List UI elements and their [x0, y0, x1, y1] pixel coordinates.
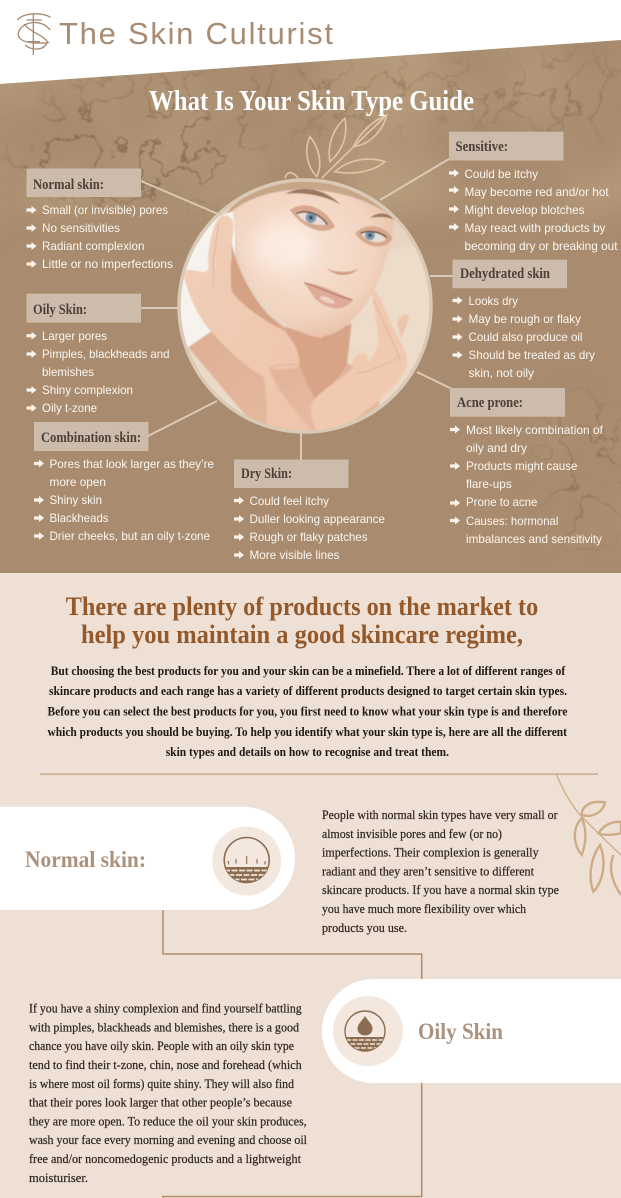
heading: sensitive: Sensitive: — [456, 139, 508, 155]
text: oily skin description: is where most oil forms) quite shiny. They will also find — [29, 1077, 295, 1091]
list: dehydrated skin: Could also produce oil — [468, 330, 582, 344]
list: oily skin: blemishes — [42, 365, 94, 379]
intro text: Before you can select the best products for you, you first need to know what your skin type is and therefore — [48, 704, 568, 718]
text: normal skin description: skincare products. If you have a normal skin type — [322, 883, 559, 897]
list: combination skin: more open — [50, 475, 106, 489]
text: normal skin description: radiant and they aren’t sensitive to different — [322, 864, 534, 878]
logo — [17, 13, 333, 55]
decorative leaf branch — [557, 775, 621, 895]
text: oily skin description: they are more open. To reduce the oil your skin produces, — [29, 1114, 307, 1128]
list: combination skin: Pores that look larger as they’re — [50, 457, 214, 471]
marble background — [0, 30, 621, 575]
heading: normal skin: Normal skin: — [33, 177, 104, 193]
panel: normal skin — [26, 168, 173, 271]
facial features — [285, 189, 394, 308]
list: normal skin: Small (or invisible) pores — [42, 203, 168, 217]
list: combination skin — [34, 457, 214, 543]
text: oily skin description: that their pores look larger that other people’s because — [29, 1096, 292, 1110]
intro heading — [66, 592, 538, 649]
list: oily skin — [26, 329, 170, 415]
list: dry skin — [234, 494, 385, 562]
heading: acne prone — [450, 388, 565, 417]
list: dehydrated skin: Looks dry — [468, 294, 518, 308]
heading: normal skin: Normal skin: — [25, 847, 146, 872]
heading: combination skin: Combination skin: — [41, 430, 141, 446]
list: normal skin: Radiant complexion — [42, 239, 144, 253]
heading: dehydrated skin — [452, 260, 567, 288]
header band — [0, 0, 621, 90]
heading: combination skin — [34, 422, 148, 451]
heading: oily skin: Oily Skin — [418, 1019, 503, 1044]
text: oily skin description: with pimples, blackheads and blemishes, there is a good — [29, 1020, 300, 1034]
list: dehydrated skin — [452, 294, 595, 380]
text: oily skin description: wash your face every morning and evening and choose oil — [29, 1133, 307, 1147]
list: normal skin — [26, 203, 173, 271]
text: oily skin description: chance you have oily skin. People with an oily skin type — [29, 1039, 294, 1053]
logo wordmark: The Skin Culturist — [59, 16, 333, 51]
intro text: skincare products and each range has a variety of different products designed to target certain skin types. — [49, 684, 567, 698]
list: normal skin: Little or no imperfections — [42, 257, 173, 271]
intro heading: help you maintain a good skincare regime, — [81, 620, 523, 649]
heading: dry skin — [234, 460, 348, 488]
text: oily skin description: tend to find their t-zone, chin, nose and forehead (which — [29, 1058, 302, 1072]
list: dry skin: More visible lines — [250, 548, 340, 562]
list: dry skin: Rough or flaky patches — [250, 530, 368, 544]
panel: oily skin — [26, 294, 170, 415]
list: dehydrated skin: Should be treated as dry — [468, 348, 595, 362]
panel: dehydrated skin — [452, 260, 595, 380]
text: oily skin description: free and/or noncomedogenic products and a lightweight — [29, 1152, 301, 1166]
text: normal skin description: you have much more flexibility over which — [322, 902, 527, 916]
list: oily skin: Larger pores — [42, 329, 107, 343]
panel: sensitive — [449, 132, 618, 253]
text: normal skin description: products you use. — [322, 921, 407, 935]
list: combination skin: Drier cheeks, but an oily t-zone — [50, 529, 210, 543]
divider — [40, 774, 598, 775]
heading: normal skin — [26, 168, 141, 197]
list: dry skin: Duller looking appearance — [250, 512, 385, 526]
list: acne prone: Most likely combination of — [466, 423, 604, 437]
text: oily skin description: moisturiser. — [29, 1171, 88, 1185]
list: dehydrated skin: May be rough or flaky — [468, 312, 581, 326]
list: acne prone: flare-ups — [466, 477, 512, 491]
list: sensitive: Could be itchy — [464, 167, 538, 181]
list: sensitive: becoming dry or breaking out — [464, 239, 618, 253]
list: acne prone: Prone to acne — [466, 495, 538, 509]
list: acne prone: Causes: hormonal — [466, 514, 558, 528]
icon: oily skin — [333, 996, 403, 1066]
list: dehydrated skin: skin, not oily — [468, 366, 534, 380]
list: acne prone: Products might cause — [466, 459, 578, 473]
heading: dry skin: Dry Skin: — [241, 466, 292, 482]
heading: acne prone: Acne prone: — [457, 395, 523, 411]
list: sensitive — [449, 167, 618, 253]
intro text: skin types and details on how to recognise and treat them. — [166, 745, 449, 759]
list: combination skin: Shiny skin — [50, 493, 102, 507]
panel: combination skin — [34, 422, 214, 543]
intro text — [48, 664, 568, 759]
text: normal skin description: People with normal skin types have very small or — [322, 808, 558, 822]
heading: sensitive — [449, 132, 564, 160]
intro text: which products you should be buying. To help you identify what your skin type is, here are all the different — [48, 725, 568, 739]
list: acne prone: imbalances and sensitivity — [466, 532, 602, 546]
list: dry skin: Could feel itchy — [250, 494, 329, 508]
list: oily skin: Shiny complexion — [42, 383, 133, 397]
list: combination skin: Blackheads — [50, 511, 108, 525]
heading: dehydrated skin: Dehydrated skin — [460, 266, 550, 282]
icon: normal skin — [212, 826, 281, 896]
heading: oily skin — [26, 294, 141, 323]
list: oily skin: Pimples, blackheads and — [42, 347, 170, 361]
list: sensitive: Might develop blotches — [464, 203, 584, 217]
panel: oily skin section — [29, 979, 621, 1185]
text: normal skin description: almost invisible pores and few (or no) — [322, 827, 502, 841]
intro heading: There are plenty of products on the market to — [66, 592, 538, 621]
list: acne prone — [450, 423, 604, 546]
list: normal skin: No sensitivities — [42, 221, 120, 235]
panel: normal skin section — [0, 807, 559, 935]
title: What Is Your Skin Type Guide — [149, 86, 474, 117]
connector lines between sections — [163, 905, 422, 1198]
connector lines — [141, 159, 453, 460]
panel: acne prone — [450, 388, 604, 546]
icon: monogram — [17, 13, 51, 55]
panel: marble skin type guide — [0, 30, 621, 575]
intro text: But choosing the best products for you and your skin can be a minefield. There a lot of different ranges of — [51, 664, 566, 678]
list: acne prone: oily and dry — [466, 441, 527, 455]
list: oily skin: Oily t-zone — [42, 401, 97, 415]
pill: normal skin — [0, 807, 295, 910]
decorative leaf sprig — [285, 115, 387, 178]
text: normal skin description: imperfections. Their complexion is generally — [322, 846, 539, 860]
text: oily skin description — [29, 1002, 307, 1185]
list: sensitive: May react with products by — [464, 221, 606, 235]
pill: oily skin — [322, 979, 621, 1083]
heading: oily skin: Oily Skin: — [33, 302, 87, 318]
text: normal skin description — [322, 808, 559, 935]
list: sensitive: May become red and/or hot — [464, 185, 609, 199]
text: oily skin description: If you have a shiny complexion and find yourself battling — [29, 1002, 302, 1016]
panel: dry skin — [234, 460, 385, 562]
photo: woman touching her face — [170, 173, 432, 440]
